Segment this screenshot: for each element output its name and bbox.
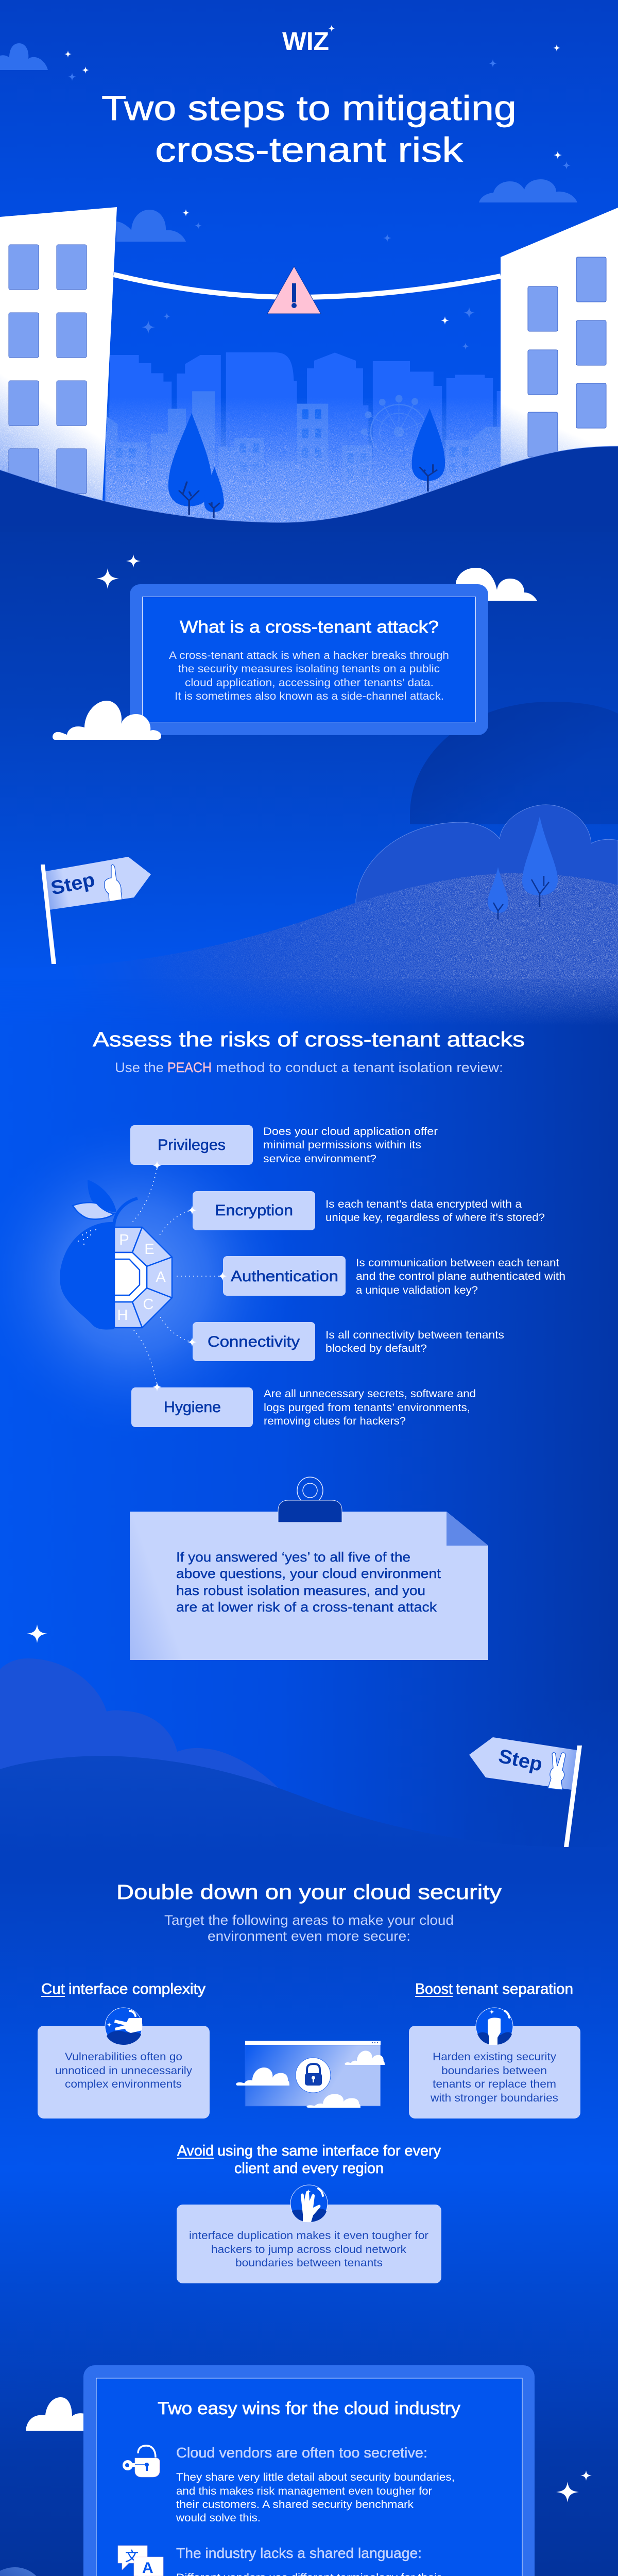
win: secretive vendors: their customers. A shared security benchmark <box>176 2499 414 2511</box>
dark hill <box>0 446 618 531</box>
title <box>101 89 517 170</box>
icon: PEACH apple: H <box>117 1307 128 1324</box>
note text: are at lower risk of a cross-tenant attack <box>176 1599 437 1615</box>
PEACH row: encryption: Is each tenant’s data encrypted with a <box>325 1198 522 1210</box>
PEACH row: hygiene: removing clues for hackers? <box>264 1415 406 1427</box>
gem segments <box>114 1227 172 1328</box>
definition text <box>169 650 449 702</box>
logo: WIZ: WIZ <box>282 27 329 56</box>
star near note <box>27 1624 47 1643</box>
stars by definition box <box>96 554 141 589</box>
panel: avoid same interface: Avoid <box>177 2143 214 2159</box>
note text <box>176 1549 441 1615</box>
PEACH row: authentication: Authentication <box>231 1268 338 1285</box>
icon: PEACH apple: E <box>144 1241 154 1258</box>
dotted connectors <box>130 1165 222 1387</box>
icon: PEACH apple: A <box>156 1269 166 1285</box>
big dark cloud <box>410 702 618 824</box>
heading: Two easy wins for the cloud industry <box>158 2399 460 2418</box>
note text: above questions, your cloud environment <box>176 1566 441 1581</box>
panel: boost tenant separation: tenant separation <box>456 1981 573 1997</box>
icon: translate bubbles: 文 <box>125 2549 139 2564</box>
panel: cut interface complexity: complex environments <box>65 2078 182 2090</box>
ferris wheel <box>361 395 427 459</box>
subheading: PEACH method: PEACH <box>167 1060 212 1075</box>
subheading: PEACH method: Use the <box>115 1060 164 1075</box>
cloud in front of definition box <box>53 701 161 740</box>
subheading: PEACH method: method to conduct a tenant isolation review: <box>216 1060 503 1075</box>
cloud on left hill <box>0 1658 278 1803</box>
panel: cut interface complexity <box>38 1981 210 2119</box>
flag: step two <box>469 1737 582 1847</box>
sky clouds <box>0 43 577 242</box>
lock badge <box>296 2058 331 2093</box>
left building <box>0 207 117 500</box>
city fog <box>106 397 507 526</box>
icon: translate bubbles <box>118 2546 163 2576</box>
stars right of wins panel <box>556 2470 592 2502</box>
panel: avoid same interface: using the same interface for every <box>217 2143 441 2159</box>
light cloud lower left <box>0 2567 90 2576</box>
right building <box>501 208 618 495</box>
panel: boost tenant separation <box>409 1981 580 2119</box>
heading: double down: Double down on your cloud security <box>116 1881 502 1904</box>
icon: hand two fingers sideways <box>105 2008 142 2045</box>
definition text: A cross-tenant attack is when a hacker breaks through <box>169 650 449 662</box>
PEACH row: encryption: Encryption <box>215 1202 293 1219</box>
PEACH row: privileges <box>130 1125 438 1170</box>
right edge fade into lower section <box>464 1700 618 1875</box>
icon: PEACH apple: P <box>119 1232 129 1248</box>
PEACH row: privileges: Does your cloud application offer <box>263 1126 438 1138</box>
win: secretive vendors <box>176 2445 455 2524</box>
icon: hand one finger <box>104 865 122 902</box>
illustration: browser window with lock <box>236 2041 385 2108</box>
background: definition section <box>0 515 618 979</box>
panel: two easy wins <box>83 2365 535 2576</box>
trees in city <box>168 409 445 518</box>
definition text: cloud application, accessing other tenants’ data. <box>185 677 434 689</box>
panel: avoid same interface: hackers to jump across cloud network <box>211 2244 407 2256</box>
subheading: target areas: Target the following areas to make your cloud <box>164 1912 454 1928</box>
panel: avoid same interface: interface duplication makes it even tougher for <box>189 2230 428 2242</box>
background: lower dark section <box>0 1875 618 2576</box>
flag: step one: Step <box>49 869 97 900</box>
hill base continuation <box>0 526 618 532</box>
PEACH row: connectivity <box>187 1322 504 1361</box>
panel: avoid same interface: client and every region <box>234 2160 384 2177</box>
panel: cut interface complexity: Cut <box>41 1981 65 1997</box>
trees on hill <box>488 817 558 920</box>
PEACH row: privileges: Privileges <box>158 1137 226 1154</box>
PEACH row: hygiene: logs purged from tenants’ environments, <box>264 1402 470 1414</box>
icon: open hand <box>290 2185 328 2222</box>
PEACH row: connectivity: blocked by default? <box>325 1343 427 1354</box>
PEACH row: privileges: minimal permissions within its <box>263 1139 421 1151</box>
PEACH row: hygiene: Hygiene <box>164 1399 221 1416</box>
win: secretive vendors: and this makes risk management even tougher for <box>176 2485 432 2497</box>
icon: PEACH apple: C <box>143 1296 153 1313</box>
title: Two steps to mitigating <box>101 89 517 128</box>
panel: boost tenant separation: tenants or replace them <box>433 2078 556 2090</box>
heading: What is a cross-tenant attack? <box>180 617 439 636</box>
panel: boost tenant separation: Boost <box>415 1981 453 1997</box>
clip ring <box>297 1477 323 1504</box>
panel: avoid same interface <box>177 2143 441 2283</box>
apple glow <box>0 1113 299 1443</box>
icon: PEACH apple <box>60 1180 172 1330</box>
leaves and stem <box>88 1180 116 1212</box>
white cloud behind wins panel <box>26 2397 88 2431</box>
panel: boost tenant separation: with stronger boundaries <box>430 2092 558 2104</box>
title: cross-tenant risk <box>155 130 464 170</box>
icon: warning triangle <box>267 266 321 314</box>
city skyline <box>104 352 501 512</box>
PEACH row: privileges: service environment? <box>263 1153 376 1165</box>
panel: what is a cross-tenant attack <box>130 584 488 735</box>
PEACH row: authentication <box>218 1256 565 1296</box>
win: secretive vendors: would solve this. <box>176 2512 261 2524</box>
definition text: the security measures isolating tenants on a public <box>178 663 440 675</box>
PEACH row: authentication: a unique validation key? <box>356 1284 478 1296</box>
panel: boost tenant separation: boundaries between <box>441 2065 547 2077</box>
note text: If you answered ‘yes’ to all five of the <box>176 1549 410 1565</box>
win: secretive vendors: Cloud vendors are often too secretive: <box>176 2445 427 2461</box>
heading: assess the risks: Assess the risks of cross-tenant attacks <box>93 1028 525 1051</box>
speckled hill <box>0 873 618 1030</box>
panel: cut interface complexity: interface complexity <box>68 1981 206 1997</box>
cloud behind definition box <box>456 568 537 601</box>
PEACH row: hygiene <box>131 1382 476 1427</box>
background cloud on hill <box>356 805 618 927</box>
rope between buildings <box>114 275 501 297</box>
clouds <box>236 2067 289 2086</box>
PEACH row: encryption <box>187 1191 545 1230</box>
icon: fist <box>476 2008 513 2045</box>
PEACH row: hygiene: Are all unnecessary secrets, software and <box>264 1388 476 1400</box>
flag: step two: Step <box>496 1745 544 1776</box>
sky stars <box>64 44 571 350</box>
PEACH row: authentication: Is communication between each tenant <box>356 1257 559 1269</box>
win: shared language <box>176 2545 470 2576</box>
PEACH row: encryption: unique key, regardless of where it’s stored? <box>325 1212 545 1224</box>
panel: cut interface complexity: Vulnerabilities often go <box>65 2051 182 2063</box>
subheading: target areas: environment even more secure: <box>208 1928 410 1944</box>
definition text: It is sometimes also known as a side-channel attack. <box>175 690 444 702</box>
PEACH row: connectivity: Is all connectivity between tenants <box>325 1329 504 1341</box>
subheading: target areas <box>164 1912 454 1944</box>
subheading: PEACH method <box>115 1060 503 1075</box>
PEACH row: authentication: and the control plane authenticated with <box>356 1270 565 1282</box>
panel: boost tenant separation: Harden existing security <box>433 2051 557 2063</box>
note text: has robust isolation measures, and you <box>176 1583 425 1598</box>
hill lower left <box>0 1756 618 1876</box>
background: night sky <box>0 0 618 526</box>
background: risks section <box>0 979 618 1875</box>
flag: step one <box>41 857 151 964</box>
win: shared language: The industry lacks a shared language: <box>176 2545 422 2561</box>
panel: avoid same interface: boundaries between tenants <box>235 2257 383 2269</box>
PEACH row: connectivity: Connectivity <box>208 1333 300 1350</box>
icon: padlock and key <box>123 2446 160 2477</box>
win: secretive vendors: They share very little detail about security boundaries, <box>176 2471 455 2483</box>
icon: hand two fingers <box>548 1753 565 1790</box>
apple left half <box>60 1222 114 1330</box>
clip body <box>278 1500 342 1522</box>
panel: cut interface complexity: unnoticed in unnecessarily <box>55 2065 193 2077</box>
callout: note with clip <box>130 1477 488 1660</box>
